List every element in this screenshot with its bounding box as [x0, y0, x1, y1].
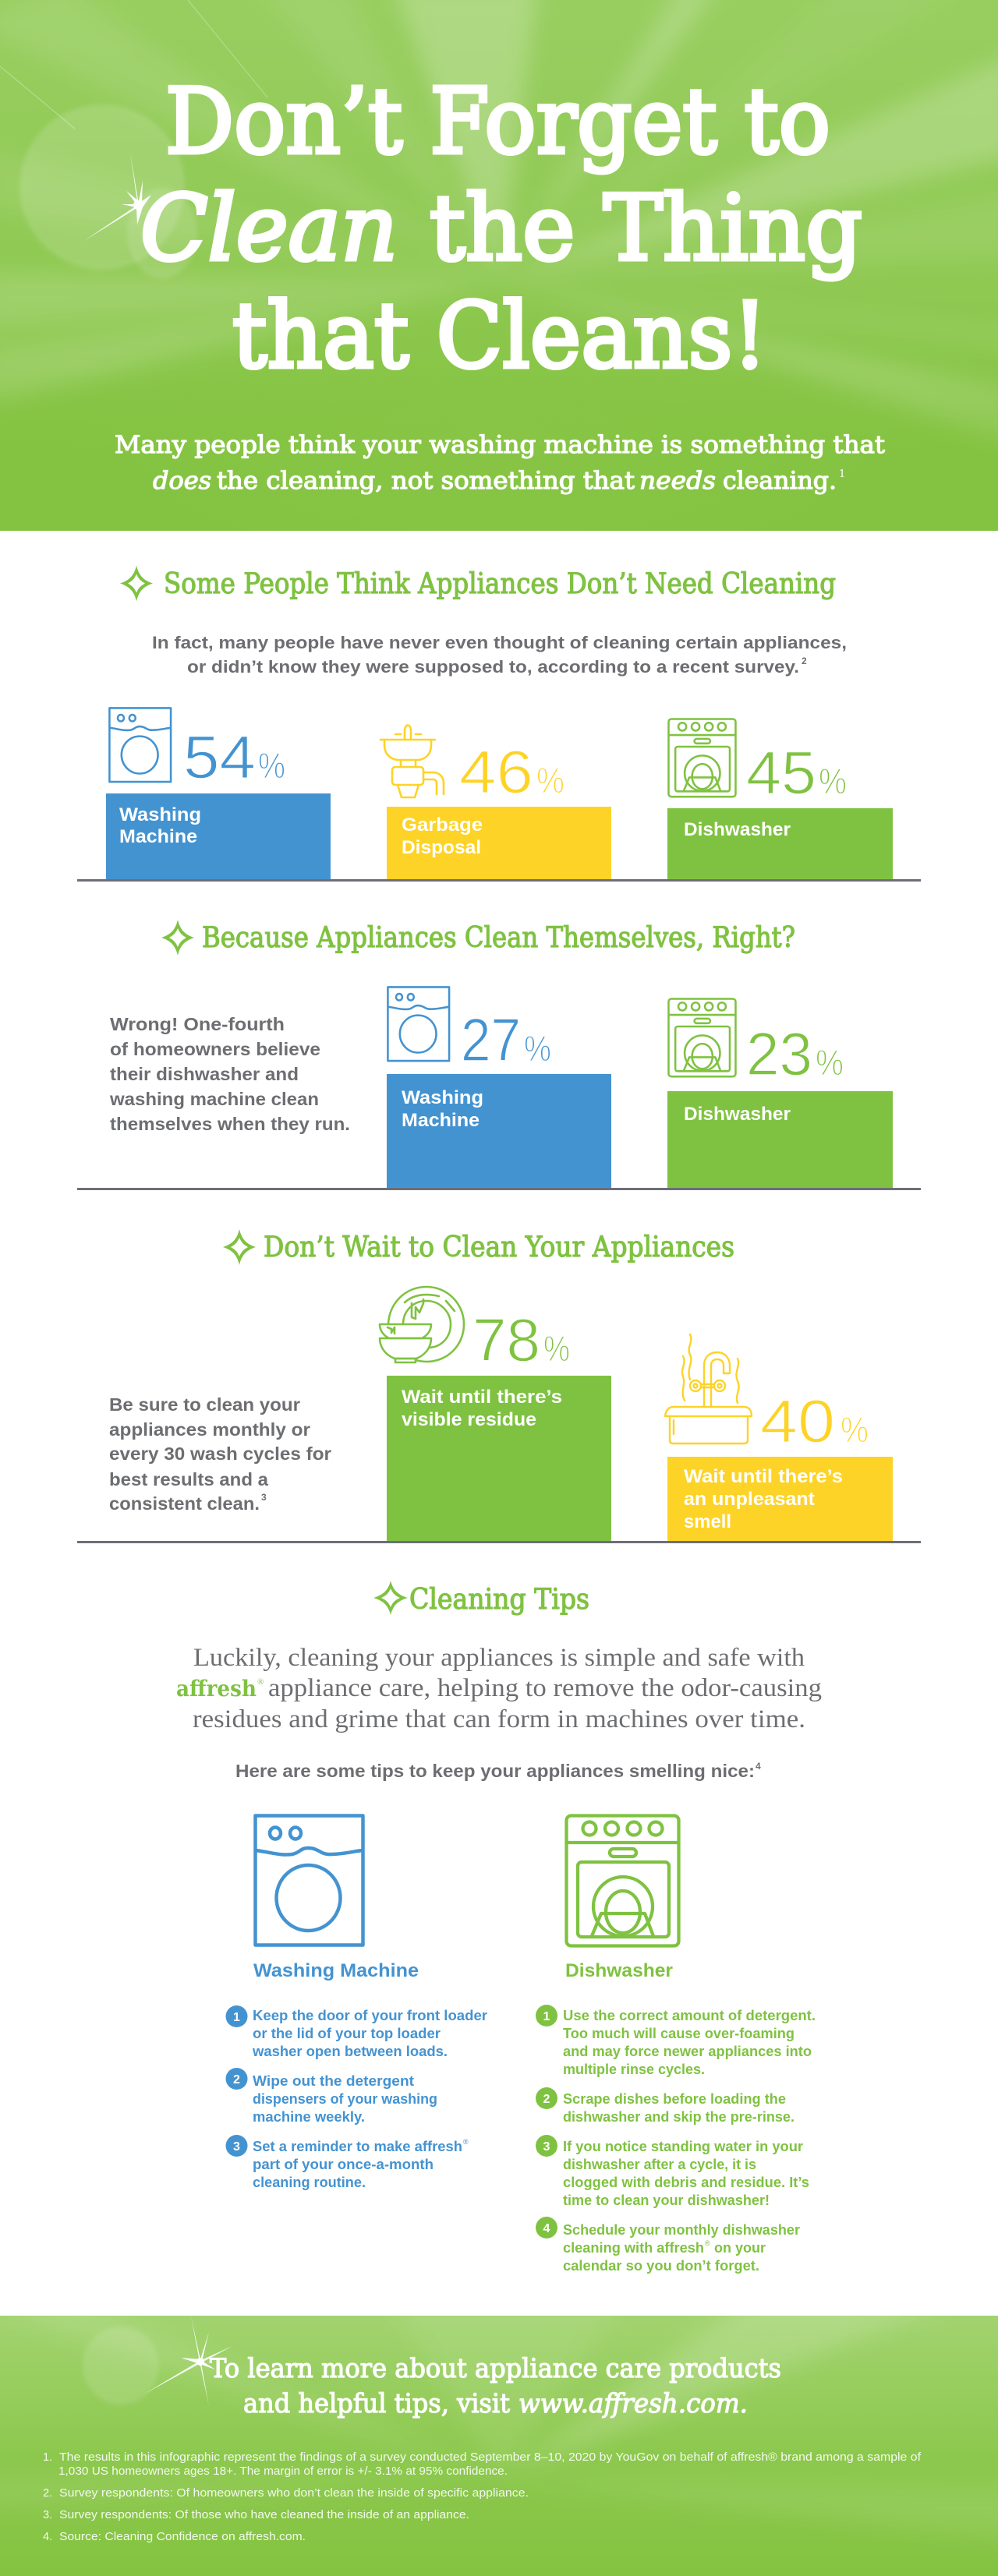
- heading: Some People Think Appliances Don’t Need Cleaning: [164, 568, 836, 600]
- bar: unpleasant smell: Wait until there’s: [684, 1466, 843, 1487]
- subtitle: Many people think your washing machine is something that: [115, 431, 886, 459]
- subtitle: 1: [839, 468, 845, 480]
- intro text: [152, 633, 847, 677]
- tip 2: [536, 2087, 795, 2125]
- footnotes: The results in this infographic represent the findings of a survey conducted September 8–10, 2020 by YouGov on behalf of affresh® brand among a sample of: [59, 2451, 922, 2464]
- stat: 46%: %: [536, 760, 564, 800]
- subtitle: the cleaning, not something that: [217, 467, 635, 495]
- tip 3: clogged with debris and residue. It’s: [563, 2175, 809, 2190]
- call to action: To learn more about appliance care products: [210, 2353, 781, 2384]
- tip 1: Use the correct amount of detergent.: [563, 2008, 816, 2023]
- text: wrong explanation: of homeowners believe: [110, 1039, 320, 1059]
- icon: sparkle: [161, 920, 194, 956]
- tip 3: ®: [463, 2138, 469, 2146]
- subtitle: cleaning.: [723, 467, 837, 495]
- intro paragraph: appliance care, helping to remove the odor-causing: [268, 1674, 822, 1702]
- intro text: or didn’t know they were supposed to, according to a recent survey.: [187, 657, 799, 677]
- bar chart: believe self cleaning: [387, 987, 893, 1188]
- icon: garbage disposal: [380, 725, 444, 797]
- stat: 46%: [459, 737, 564, 806]
- stat: 78%: 78: [472, 1306, 540, 1374]
- column: dishwasher tips: [536, 1816, 816, 2274]
- tip 2: 2: [233, 2073, 240, 2087]
- title: Don’t Forget to: [165, 69, 830, 175]
- tip 2: 2: [543, 2093, 550, 2106]
- stat: 40%: 40: [760, 1387, 835, 1455]
- tip 2: [226, 2068, 437, 2125]
- heading: Don’t Wait to Clean Your Appliances: [264, 1231, 734, 1263]
- text: clean monthly: Be sure to clean your: [109, 1394, 300, 1415]
- text: wrong explanation: [109, 1014, 350, 1134]
- icon: smelly sink: [665, 1334, 752, 1443]
- tip 3: 3: [233, 2140, 240, 2154]
- bar chart: waiting to clean: [380, 1287, 893, 1541]
- tip 4: cleaning with affresh: [563, 2240, 704, 2256]
- stat: 54%: [183, 723, 285, 791]
- bar: washing machine: Washing: [402, 1087, 483, 1108]
- tip 3: Set a reminder to make affresh: [253, 2139, 462, 2154]
- text: clean monthly: appliances monthly or: [109, 1419, 310, 1440]
- subtitle: does: [153, 467, 211, 495]
- footnotes: 4.: [43, 2531, 52, 2543]
- label: Dishwasher: [565, 1960, 673, 1981]
- tip 3: dishwasher after a cycle, it is: [563, 2157, 756, 2172]
- tip 1: 1: [233, 2011, 240, 2024]
- label: Washing Machine: [253, 1960, 419, 1981]
- footnotes: Survey respondents: Of those who have cleaned the inside of an appliance.: [59, 2509, 469, 2521]
- call to action: and helpful tips, visit: [243, 2388, 510, 2419]
- tip 4: on your: [714, 2240, 766, 2256]
- subtitle: needs: [639, 467, 716, 495]
- text: wrong explanation: their dishwasher and: [110, 1064, 299, 1084]
- bar: washing machine: Machine: [402, 1110, 480, 1131]
- intro paragraph: [176, 1644, 822, 1733]
- stat: 23%: %: [816, 1042, 844, 1083]
- icon: sparkle: [120, 566, 153, 602]
- text: wrong explanation: washing machine clean: [109, 1089, 319, 1109]
- tip 1: Keep the door of your front loader: [253, 2008, 487, 2023]
- tip 4: calendar so you don’t forget.: [563, 2258, 759, 2274]
- icon: lens flare: [0, 0, 267, 278]
- tip 1: [226, 2005, 487, 2059]
- tip 2: Wipe out the detergent: [253, 2073, 414, 2089]
- panel: footer: [0, 2299, 998, 2576]
- title: that Cleans!: [232, 284, 767, 389]
- tip 4: [536, 2217, 800, 2274]
- subtitle: [115, 431, 886, 495]
- tip 1: 1: [543, 2010, 550, 2023]
- icon: footer sparkle: [143, 2316, 232, 2406]
- icon: sparkle: [373, 1581, 408, 1615]
- stat: 78%: %: [543, 1328, 570, 1369]
- stat: 27%: %: [524, 1028, 551, 1069]
- panel: because appliances clean themselves: [77, 920, 921, 1190]
- intro paragraph: residues and grime that can form in machines over time.: [193, 1705, 805, 1733]
- stat: 45%: %: [819, 761, 847, 801]
- bar: visible residue: Wait until there’s: [402, 1387, 562, 1408]
- tip 2: dishwasher and skip the pre-rinse.: [563, 2109, 795, 2125]
- intro paragraph: affresh: [176, 1676, 257, 1701]
- sub heading: Here are some tips to keep your appliances smelling nice:: [235, 1761, 755, 1781]
- bar: washing machine: [387, 1074, 611, 1188]
- header background with light rays: [0, 0, 998, 531]
- stat: 45%: 45: [746, 738, 816, 807]
- stat: 46%: 46: [459, 737, 533, 806]
- tip 4: 4: [543, 2222, 550, 2235]
- footnotes: [43, 2451, 922, 2543]
- icon: title sparkle: [83, 153, 151, 242]
- tip 1: or the lid of your top loader: [253, 2026, 441, 2041]
- bar: dishwasher: Dishwasher: [684, 819, 791, 840]
- panel: header banner: [0, 0, 998, 531]
- tip 3: [536, 2135, 809, 2208]
- panel: don't wait to clean: [77, 1229, 921, 1543]
- bar: dishwasher: [667, 808, 893, 879]
- text: clean monthly: 3: [261, 1492, 267, 1503]
- icon: washing machine: [109, 708, 171, 782]
- title: Clean: [140, 176, 398, 281]
- stat: 54%: 54: [183, 723, 256, 791]
- sub heading: 4: [756, 1761, 761, 1772]
- call to action: www.affresh.com.: [518, 2388, 748, 2419]
- footnotes: 2.: [43, 2487, 52, 2500]
- footnotes: 3.: [43, 2509, 52, 2521]
- call to action: [210, 2353, 781, 2419]
- bar: unpleasant smell: smell: [684, 1511, 731, 1532]
- stat: 54%: %: [258, 745, 285, 786]
- tip 3: time to clean your dishwasher!: [563, 2193, 770, 2208]
- tip 2: Scrape dishes before loading the: [563, 2091, 786, 2107]
- intro paragraph: ®: [257, 1677, 264, 1687]
- bar: washing machine: Machine: [119, 826, 197, 847]
- tip 1: and may force newer appliances into: [563, 2044, 812, 2059]
- stat: 45%: [746, 738, 847, 807]
- tip 1: washer open between loads.: [252, 2044, 448, 2059]
- tip 1: [536, 2005, 816, 2077]
- footnotes: 1,030 US homeowners ages 18+. The margin of error is +/- 3.1% at 95% confidence.: [58, 2465, 508, 2478]
- icon: washing machine: [388, 987, 449, 1061]
- panel: cleaning tips: [176, 1581, 822, 2274]
- column: washing machine tips: [226, 1816, 487, 2190]
- heading: Because Appliances Clean Themselves, Right?: [202, 922, 795, 954]
- bar: washing machine: Washing: [119, 804, 201, 825]
- icon: dishwasher: [668, 998, 735, 1076]
- icon: footer lens flare: [83, 2327, 159, 2405]
- bar: unpleasant smell: an unpleasant: [684, 1489, 815, 1510]
- tip 4: Schedule your monthly dishwasher: [563, 2222, 800, 2238]
- bar: dishwasher: Dishwasher: [684, 1104, 791, 1125]
- stat: 40%: %: [841, 1409, 869, 1450]
- intro text: 2: [802, 655, 807, 666]
- bar: garbage disposal: Garbage: [402, 814, 483, 836]
- icon: dirty dishes: [380, 1287, 464, 1362]
- tip 3: part of your once-a-month: [253, 2157, 434, 2172]
- text: clean monthly: consistent clean.: [109, 1493, 260, 1514]
- icon: washing machine: [256, 1816, 363, 1945]
- stat: 40%: [760, 1387, 869, 1455]
- text: clean monthly: every 30 wash cycles for: [109, 1443, 331, 1464]
- footnotes: Source: Cleaning Confidence on affresh.com.: [59, 2531, 306, 2543]
- intro text: In fact, many people have never even thought of cleaning certain appliances,: [152, 633, 847, 652]
- footnotes: Survey respondents: Of homeowners who don’t clean the inside of specific appliance.: [59, 2487, 529, 2500]
- text: clean monthly: best results and a: [109, 1469, 268, 1489]
- icon: dishwasher: [566, 1816, 678, 1945]
- footer background with light rays: [0, 2299, 998, 2576]
- bar: visible residue: [387, 1376, 611, 1541]
- bar: garbage disposal: [387, 807, 611, 879]
- title: the Thing: [430, 176, 862, 281]
- title: [140, 69, 862, 389]
- bar: washing machine: [106, 793, 331, 879]
- tip 3: cleaning routine.: [253, 2175, 366, 2190]
- text: wrong explanation: themselves when they run.: [110, 1114, 350, 1134]
- tip 3: [226, 2135, 469, 2190]
- bar: garbage disposal: Disposal: [402, 837, 481, 858]
- tip 4: ®: [705, 2239, 710, 2247]
- icon: sparkle: [223, 1229, 256, 1265]
- tip 3: 3: [543, 2140, 550, 2154]
- bar: unpleasant smell: [667, 1457, 893, 1541]
- bar: dishwasher: [667, 1091, 893, 1188]
- intro paragraph: Luckily, cleaning your appliances is simple and safe with: [193, 1644, 805, 1672]
- heading: Cleaning Tips: [409, 1584, 589, 1616]
- bar chart: never cleaned: [106, 708, 893, 879]
- stat: 23%: 23: [746, 1019, 812, 1088]
- tip 2: machine weekly.: [253, 2109, 365, 2125]
- tip 1: Too much will cause over-foaming: [563, 2026, 795, 2041]
- tip 2: dispensers of your washing: [253, 2091, 437, 2107]
- stat: 78%: [472, 1306, 570, 1374]
- footnotes: 1.: [43, 2451, 52, 2464]
- icon: dishwasher: [668, 719, 735, 797]
- stat: 23%: [746, 1019, 844, 1088]
- tip 3: If you notice standing water in your: [563, 2139, 803, 2154]
- text: wrong explanation: Wrong! One-fourth: [110, 1014, 285, 1034]
- bar: visible residue: visible residue: [402, 1409, 536, 1430]
- stat: 27%: 27: [461, 1005, 521, 1074]
- tip 1: multiple rinse cycles.: [563, 2062, 705, 2077]
- text: clean monthly: [109, 1394, 331, 1514]
- panel: some people think appliances don't need cleaning: [77, 566, 921, 882]
